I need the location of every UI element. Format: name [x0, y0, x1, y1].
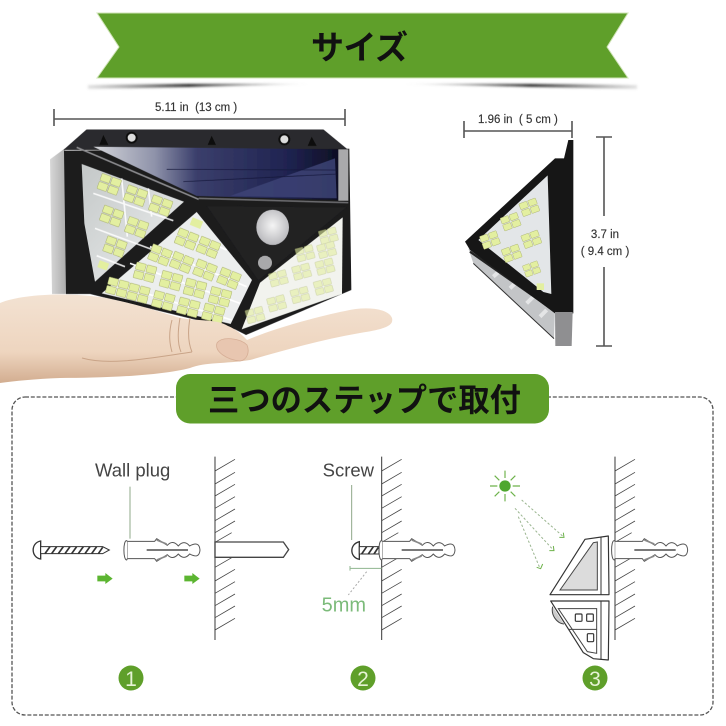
- banner ribbon: [97, 13, 628, 78]
- LED panel: right: [242, 217, 343, 329]
- section heading: [176, 374, 549, 424]
- icon: wall: [615, 457, 635, 640]
- step 2: [322, 457, 455, 640]
- dimension: height of lamp: [581, 137, 629, 346]
- dimension: width of lamp: 5.11 in (13 cm ): [155, 102, 237, 114]
- lamp side: lower LEDs: [468, 248, 555, 339]
- lamp side photo: [465, 140, 573, 346]
- leader line: [128, 487, 131, 539]
- icon: wall: [382, 457, 402, 640]
- step 3: [490, 457, 688, 660]
- icon: inserted plug: [612, 539, 688, 561]
- label: screw: Screw: [323, 460, 375, 481]
- dimension: height of lamp: 3.7 in: [591, 229, 619, 241]
- lamp side: metal base: [555, 312, 573, 346]
- banner shadows: [88, 84, 637, 89]
- icon: screw: [33, 541, 109, 559]
- lamp body: [64, 149, 351, 335]
- step number 2: 2: [357, 668, 369, 691]
- palm crease: [82, 318, 192, 361]
- solar panel: [93, 147, 338, 200]
- center sensor panel: [207, 206, 347, 281]
- step number 2: [350, 666, 376, 691]
- lamp front photo: [50, 129, 351, 335]
- label: wall plug: Wall plug: [95, 460, 170, 481]
- light sensor: [258, 256, 272, 270]
- measurement: gap: [350, 566, 382, 571]
- banner title: サイズ: [311, 29, 408, 66]
- label: 5mm: 5mm: [322, 595, 366, 617]
- hand holding lamp: [0, 295, 392, 383]
- icon: wall with hole: [215, 457, 289, 640]
- step 1: [33, 457, 289, 640]
- banner: size heading: [88, 13, 637, 89]
- LED panel: left: [82, 164, 184, 282]
- icon: screw head: [352, 542, 379, 559]
- icon: wall plug: [124, 539, 200, 561]
- dimension: depth of lamp: [464, 114, 572, 138]
- arrow: [97, 573, 113, 584]
- motion sensor: [256, 210, 289, 245]
- leader line: [350, 485, 353, 540]
- dimension: width of lamp: [54, 102, 345, 126]
- dimension: height of lamp: ( 9.4 cm ): [581, 246, 629, 258]
- lamp top plate: [63, 129, 348, 150]
- icon: inserted plug: [379, 539, 455, 561]
- icon: sun: [490, 471, 520, 501]
- dimension: depth of lamp: 1.96 in ( 5 cm ): [478, 114, 558, 126]
- LED panel: center: [102, 212, 252, 324]
- arrow: [184, 573, 200, 584]
- panel: installation steps: [12, 374, 713, 715]
- lamp side: black frame: [465, 140, 573, 313]
- step number 3: 3: [589, 668, 601, 691]
- lamp left side: [50, 148, 78, 294]
- step number 1: 1: [125, 668, 137, 691]
- step number 3: [582, 666, 608, 691]
- section heading: 三つのステップで取付: [208, 382, 521, 418]
- arrows: sunlight: [515, 500, 564, 569]
- icon: lamp outline: [550, 536, 609, 660]
- thumb nail: [217, 339, 248, 361]
- dashed frame: [12, 397, 713, 715]
- lamp side: LED panel: [478, 175, 551, 294]
- step number 1: [118, 666, 144, 691]
